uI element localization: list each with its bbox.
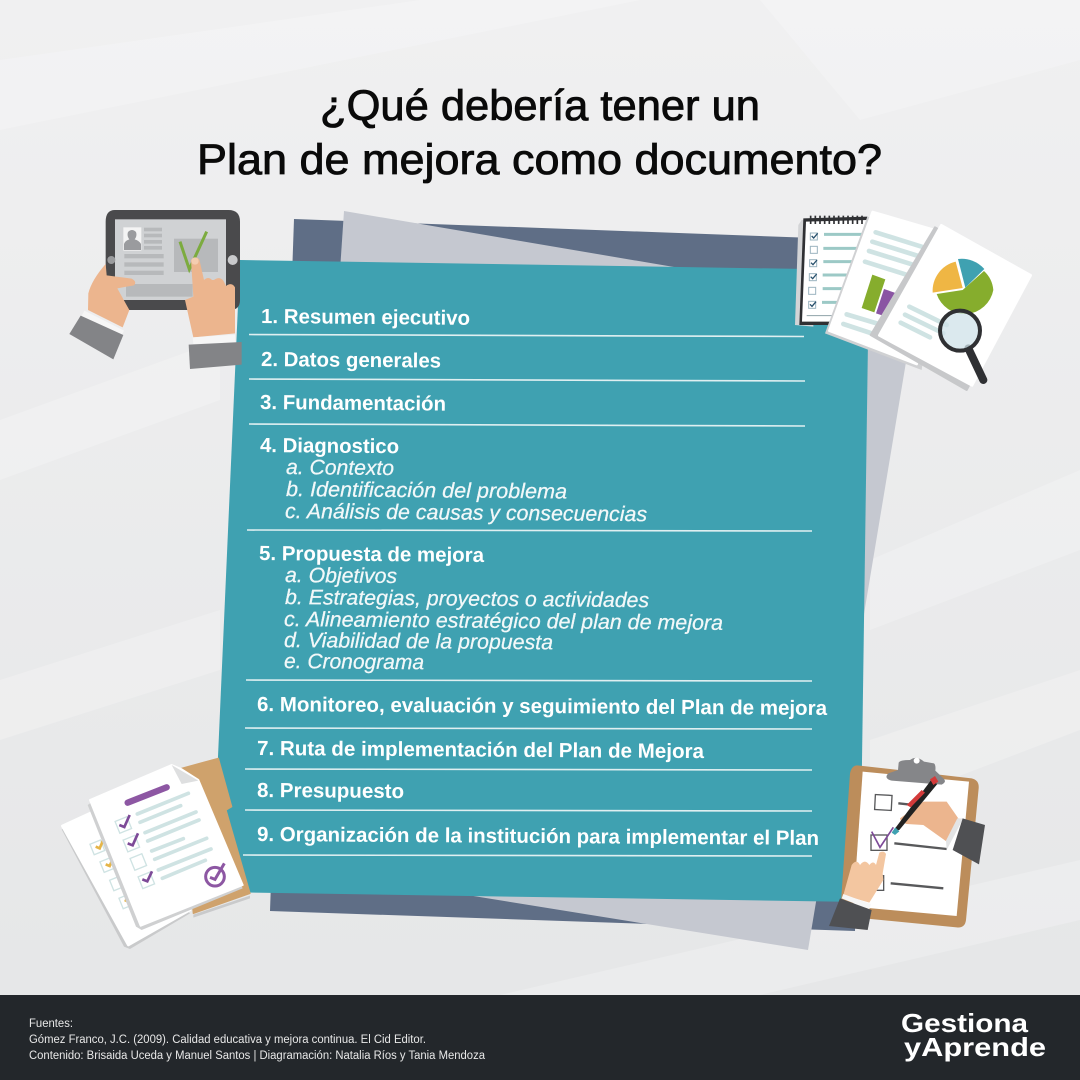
item 9: Organización: 9. Organización de la institución para implementar el Plan — [257, 823, 819, 850]
icon: hands with tablet — [69, 210, 242, 369]
notebook — [795, 216, 867, 327]
footer: sources text: Gómez Franco, J.C. (2009). Calidad educativa y mejora continua. El Cid Editor. — [29, 1034, 426, 1046]
item 4: Diagnostico: b. Identificación del problema — [286, 478, 567, 503]
item 4: Diagnostico: c. Análisis de causas y consecuencias — [285, 500, 648, 526]
item 3: Fundamentación: 3. Fundamentación — [260, 391, 446, 416]
item 7: Ruta de implementación: 7. Ruta de implementación del Plan de Mejora — [257, 737, 705, 763]
item 5: Propuesta de mejora: b. Estrategias, proyectos o actividades — [285, 586, 650, 612]
logo: Gestiona y Aprende — [901, 1008, 1046, 1062]
footer: sources text: Fuentes: — [29, 1018, 73, 1030]
item 5: Propuesta de mejora: d. Viabilidad de la propuesta — [284, 629, 553, 654]
item 4: Diagnostico: a. Contexto — [286, 456, 394, 480]
panel: teal list — [212, 260, 869, 902]
document with pie chart — [871, 225, 1031, 390]
title: ¿Qué debería tener un — [320, 82, 760, 130]
document with bars — [825, 212, 940, 370]
logo: Gestiona y Aprende: yAprende — [904, 1032, 1046, 1062]
item 8: Presupuesto: 8. Presupuesto — [257, 779, 404, 803]
title: Plan de mejora como documento? — [197, 136, 882, 184]
item 5: Propuesta de mejora — [246, 542, 812, 681]
item 2: Datos generales: 2. Datos generales — [261, 348, 441, 373]
title — [197, 82, 882, 184]
icon: documents and magnifier — [795, 212, 1031, 390]
icon: folder with checklists — [62, 758, 250, 949]
footer bar — [0, 995, 1080, 1080]
item 5: Propuesta de mejora: 5. Propuesta de mejora — [259, 542, 485, 567]
footer: sources text — [29, 1018, 486, 1062]
item 4: Diagnostico — [247, 434, 812, 531]
item 4: Diagnostico: 4. Diagnostico — [260, 434, 399, 458]
item 5: Propuesta de mejora: a. Objetivos — [285, 564, 398, 588]
panel: back sheets — [270, 211, 915, 950]
item 5: Propuesta de mejora: e. Cronograma — [284, 650, 424, 674]
item 5: Propuesta de mejora: c. Alineamiento estratégico del plan de mejora — [284, 608, 723, 635]
logo: Gestiona y Aprende: Gestiona — [901, 1008, 1029, 1038]
item 1: Resumen ejecutivo: 1. Resumen ejecutivo — [261, 305, 470, 330]
item 6: Monitoreo: 6. Monitoreo, evaluación y seguimiento del Plan de mejora — [257, 693, 828, 720]
footer: sources text: Contenido: Brisaida Uceda y Manuel Santos | Diagramación: Natalia Ríos y Tania Mendoza — [29, 1050, 486, 1062]
icon: hands with clipboard — [829, 758, 985, 930]
